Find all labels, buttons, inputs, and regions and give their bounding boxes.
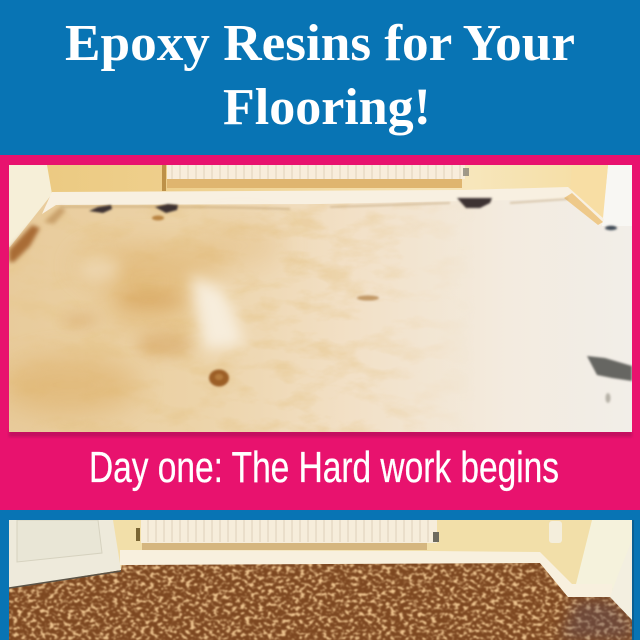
wall: [45, 165, 615, 193]
carpet base: [9, 563, 632, 640]
photo shadow: [9, 430, 632, 437]
radiator: [162, 165, 469, 191]
title: [65, 15, 575, 136]
title: Flooring!: [223, 79, 431, 136]
small brown marks: [152, 216, 610, 403]
cooler carpet corner: [560, 600, 632, 640]
panel: blue lower band: [0, 510, 640, 640]
dirty line along skirting: [60, 199, 568, 209]
radiator: [136, 520, 439, 550]
skirting board: [120, 550, 612, 597]
photo: bare stained floor before work: [0, 165, 632, 432]
rust along left skirting: [9, 225, 40, 262]
door: [9, 520, 121, 588]
left door and wall edge: [9, 165, 52, 247]
right white wall corner: [602, 165, 632, 226]
wall: [66, 520, 592, 597]
panel: pink photo band: [0, 155, 640, 510]
title: Epoxy Resins for Your: [65, 15, 575, 72]
right door: [610, 592, 632, 620]
dark adhesive patches: [89, 198, 632, 381]
right edge shadow of lower photo: [632, 520, 634, 640]
mottled floor texture: [54, 202, 442, 432]
carpet texture: [9, 563, 632, 640]
panel: blue title band: [0, 0, 640, 155]
white wall corner: [576, 520, 632, 592]
tan stains: [0, 223, 285, 415]
skirting board: [42, 187, 604, 226]
photo: finished penny-style floor: [9, 520, 632, 640]
wall socket: [549, 521, 562, 543]
